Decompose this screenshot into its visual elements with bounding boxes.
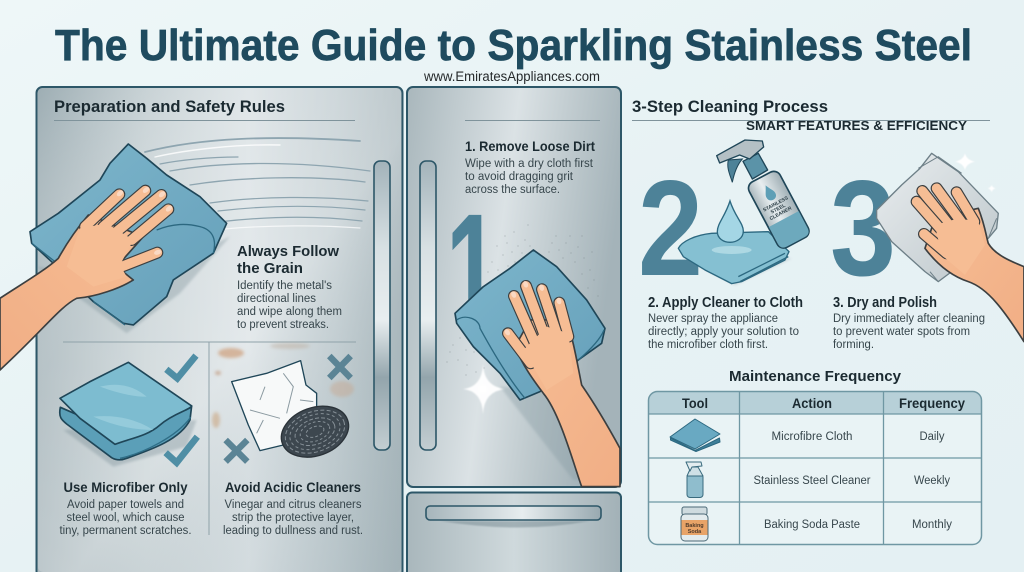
heading: 3-step cleaning process: 3-Step Cleaning Process xyxy=(632,97,828,116)
text block: always follow the grain: and wipe along them xyxy=(237,306,342,318)
row: baking soda paste: Baking Soda Paste xyxy=(764,519,860,531)
text block: always follow the grain: to prevent streaks. xyxy=(237,319,329,331)
icon: check marks xyxy=(166,356,197,463)
icon: sparkle xyxy=(463,364,506,414)
text block: always follow the grain: Identify the metal's xyxy=(237,280,332,292)
text block: dry and polish: forming. xyxy=(833,339,874,351)
icon: cross marks xyxy=(226,356,351,462)
table header: Action xyxy=(792,396,832,411)
row: stainless steel cleaner: Stainless Steel Cleaner xyxy=(754,475,871,487)
website url: www.EmiratesAppliances.com xyxy=(423,69,600,84)
panel: middle door xyxy=(407,87,621,487)
heading: preparation and safety rules: Preparation and Safety Rules xyxy=(54,97,285,116)
icon: baking soda jar xyxy=(681,507,708,541)
spray neck xyxy=(743,153,768,179)
icon: hand wiping on left door xyxy=(0,144,230,370)
icon: table cloth xyxy=(670,419,720,452)
icon: baking soda jar: Baking xyxy=(685,523,704,529)
icon: hand polishing with grey cloth xyxy=(877,153,1024,342)
icon: table spray bottle xyxy=(686,462,703,498)
icon: folded microfiber cloth xyxy=(60,362,197,467)
icon: hand wiping blue cloth xyxy=(455,250,620,487)
row: microfibre cloth xyxy=(772,431,945,443)
text block: apply cleaner to cloth: Never spray the appliance xyxy=(648,313,778,325)
text block: remove loose dirt: across the surface. xyxy=(465,184,560,196)
row: microfibre cloth: Microfibre Cloth xyxy=(772,431,852,443)
row: microfibre cloth: Daily xyxy=(920,431,945,443)
table header: Frequency xyxy=(899,396,965,411)
row: baking soda paste xyxy=(764,519,952,531)
table: maintenance frequency xyxy=(648,392,982,544)
subheading: smart features and efficiency: SMART FEATURES & EFFICIENCY xyxy=(746,118,967,133)
table header xyxy=(682,396,965,411)
spray trigger xyxy=(728,159,742,182)
text block: apply cleaner to cloth: 2. Apply Cleaner to Cloth xyxy=(648,295,803,311)
text block: remove loose dirt: to avoid dragging grit xyxy=(465,171,574,183)
bottle label: STAINLESS xyxy=(762,195,790,214)
row: stainless steel cleaner: Weekly xyxy=(914,475,950,487)
dust particles xyxy=(447,225,598,375)
text block: use microfiber only: tiny, permanent scratches. xyxy=(60,525,192,537)
bottle label: CLEANER xyxy=(769,205,793,222)
big number 3: 3 xyxy=(830,152,896,304)
text block: avoid acidic cleaners: Vinegar and citrus cleaners xyxy=(224,499,362,511)
text block: use microfiber only: steel wool, which cause xyxy=(66,512,184,524)
icon: baking soda jar: Soda xyxy=(688,529,702,535)
text block: dry and polish: Dry immediately after cleaning xyxy=(833,313,985,325)
text block: use microfiber only: Avoid paper towels and xyxy=(67,499,184,511)
title: The Ultimate Guide to Sparkling Stainless Steel xyxy=(55,21,972,70)
text block: avoid acidic cleaners: Avoid Acidic Cleaners xyxy=(225,479,361,495)
text block: avoid acidic cleaners: strip the protective layer, xyxy=(232,512,354,524)
spray head xyxy=(717,140,764,163)
heading: maintenance frequency: Maintenance Frequency xyxy=(729,368,902,385)
text block: apply cleaner to cloth: directly; apply your solution to xyxy=(648,326,799,338)
panel: preparation and safety rules xyxy=(36,87,402,572)
text block: use microfiber only xyxy=(60,479,192,537)
big number 1: 1 xyxy=(446,180,499,359)
row: baking soda paste: Monthly xyxy=(912,519,952,531)
text block: always follow the grain: directional lines xyxy=(237,293,316,305)
row: stainless steel cleaner xyxy=(754,475,950,487)
text block: apply cleaner to cloth xyxy=(648,295,803,351)
handle: drawer xyxy=(426,506,601,520)
text block: remove loose dirt: 1. Remove Loose Dirt xyxy=(465,138,595,154)
text block: always follow the grain: the Grain xyxy=(237,260,303,277)
text block: remove loose dirt xyxy=(465,138,595,196)
text block: avoid acidic cleaners xyxy=(223,479,363,537)
text block: avoid acidic cleaners: leading to dullness and rust. xyxy=(223,525,363,537)
text block: dry and polish: to prevent water spots from xyxy=(833,326,970,338)
text block: apply cleaner to cloth: the microfiber cloth first. xyxy=(648,339,768,351)
handle: left door xyxy=(374,161,390,450)
text block: always follow the grain: Always Follow xyxy=(237,243,339,260)
grain streaks xyxy=(145,138,370,229)
text block: dry and polish xyxy=(833,295,985,351)
big number 2: 2 xyxy=(638,152,703,304)
panel: bottom drawer xyxy=(407,492,621,572)
rust stained area xyxy=(212,343,354,428)
text block: use microfiber only: Use Microfiber Only xyxy=(64,479,188,495)
text block: remove loose dirt: Wipe with a dry cloth first xyxy=(465,158,594,170)
bottle label: STEEL xyxy=(770,203,787,216)
icon: cleaner bottle on blue cloth xyxy=(678,140,812,285)
handle: middle door xyxy=(420,161,436,450)
bottle label xyxy=(762,195,795,223)
text block: dry and polish: 3. Dry and Polish xyxy=(833,295,937,311)
text block: always follow the grain xyxy=(237,243,342,331)
icon: paper towel and steel wool xyxy=(232,361,356,466)
table header: Tool xyxy=(682,396,708,411)
